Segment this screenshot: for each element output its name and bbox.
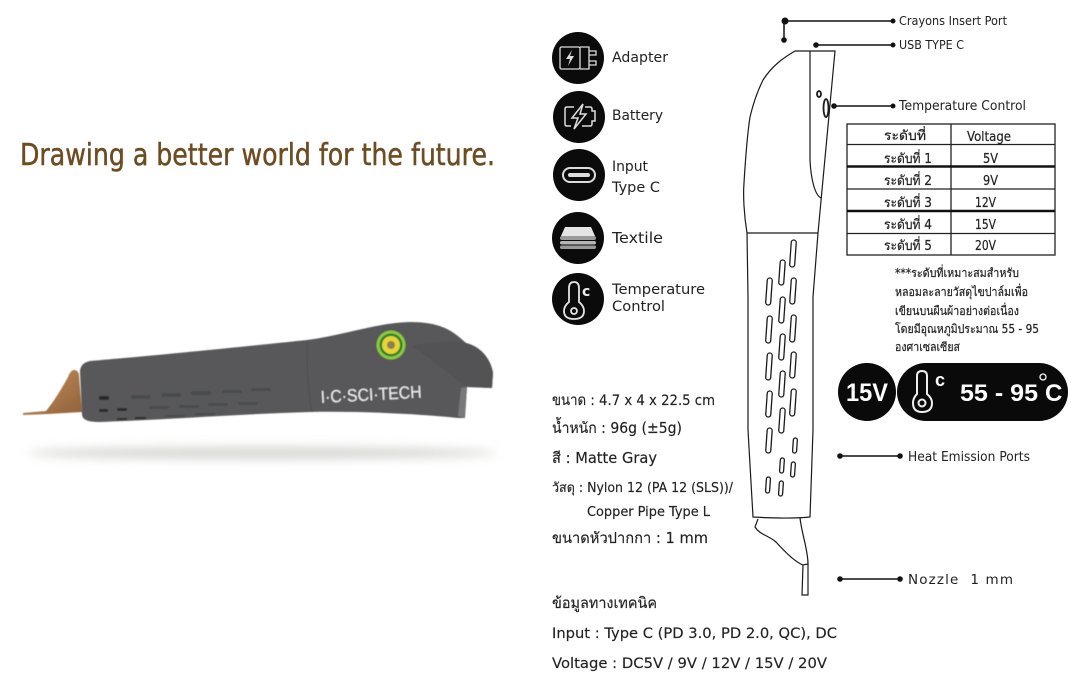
table row 1: 5V xyxy=(983,152,998,167)
technical input: Input : Type C (PD 3.0, PD 2.0, QC), DC xyxy=(552,626,837,642)
table header: ระดับที่ xyxy=(884,126,926,144)
note text xyxy=(895,264,1039,354)
callout: heat emission ports xyxy=(837,450,1030,465)
label: temperature control: Control xyxy=(612,299,665,315)
icon list xyxy=(552,32,705,325)
specifications xyxy=(552,393,734,547)
table row 4 xyxy=(884,215,996,233)
pen logo badge xyxy=(376,330,406,360)
table row 5: ระดับที่ 5 xyxy=(884,236,932,254)
pen end port xyxy=(458,387,467,418)
table row 3: 12V xyxy=(975,196,996,211)
diagram small hole xyxy=(817,91,821,97)
note text: หลอมละลายวัสดุไขปาล์มเพื่อ xyxy=(895,283,1028,300)
pen vents xyxy=(99,396,146,420)
spec: colour: สี : Matte Gray xyxy=(552,449,657,467)
pen shadow xyxy=(27,447,497,459)
badge: 15V xyxy=(838,363,896,421)
callout: temperature control xyxy=(831,99,1026,114)
table row 4: ระดับที่ 4 xyxy=(884,215,932,233)
spec: material line 2: Copper Pipe Type L xyxy=(587,505,711,520)
callout: nozzle xyxy=(837,572,1013,588)
icon: temperature xyxy=(552,273,604,325)
icon: textile xyxy=(552,212,604,264)
callout: crayons insert port xyxy=(781,14,1007,43)
diagram nozzle xyxy=(755,518,808,565)
table row 3 xyxy=(884,193,996,211)
pen grip marks xyxy=(131,388,271,417)
badge: temperature range xyxy=(897,363,1068,421)
table header: Voltage xyxy=(967,130,1011,145)
pen brand text: I·C·SCI·TECH xyxy=(320,382,422,407)
icon: temperature: c xyxy=(582,284,590,300)
pen line diagram xyxy=(744,51,835,595)
technical voltage: Voltage : DC5V / 9V / 12V / 15V / 20V xyxy=(552,656,827,672)
diagram cap seam xyxy=(810,51,821,198)
table row 3: ระดับที่ 3 xyxy=(884,193,932,211)
table header xyxy=(884,126,1011,145)
table row 1: ระดับที่ 1 xyxy=(884,149,932,167)
callout: temperature control: Temperature Control xyxy=(898,99,1026,114)
technical data xyxy=(552,594,837,672)
callout: usb type c xyxy=(813,38,964,52)
pen body xyxy=(80,322,493,422)
pen copper nozzle xyxy=(23,370,82,415)
spec: material: วัสดุ : Nylon 12 (PA 12 (SLS))/ xyxy=(552,481,734,496)
table row 4: 15V xyxy=(975,218,996,233)
label: textile: Textile xyxy=(611,229,663,247)
note text: เขียนบนผืนผ้าอย่างต่อเนื่อง xyxy=(895,302,1019,318)
table row 2: 9V xyxy=(983,174,998,189)
diagram nozzle pipe xyxy=(802,564,808,595)
diagram section line xyxy=(747,232,818,234)
badge: temperature range: 55 - 95 xyxy=(960,380,1038,407)
spec: size: ขนาด : 4.7 x 4 x 22.5 cm xyxy=(552,393,715,409)
label: temperature control: Temperature xyxy=(611,282,705,298)
pen grip seam xyxy=(307,340,312,412)
callout: usb type c: USB TYPE C xyxy=(899,38,964,52)
badge: temperature range: C xyxy=(1045,380,1062,407)
table row 2 xyxy=(884,171,998,189)
note text: ***ระดับที่เหมาะสมสำหรับ xyxy=(895,264,1019,280)
icon: input type c xyxy=(553,149,605,201)
label: adapter: Adapter xyxy=(612,50,668,66)
table row 2: ระดับที่ 2 xyxy=(884,171,932,189)
badge: 15V: 15V xyxy=(846,379,888,407)
callout: crayons insert port: Crayons Insert Port xyxy=(899,14,1007,28)
pen clip xyxy=(412,341,493,388)
table row 5: 20V xyxy=(975,239,996,254)
technical heading: ข้อมูลทางเทคนิค xyxy=(552,594,657,612)
voltage table xyxy=(847,124,1055,255)
spec: weight: น้ำหนัก : 96g (±5g) xyxy=(552,417,682,437)
label: temperature control xyxy=(611,282,705,315)
label: battery: Battery xyxy=(612,108,663,124)
label: input type c: Type C xyxy=(611,180,660,196)
diagram body outline xyxy=(744,51,835,518)
icon: battery xyxy=(553,91,605,143)
title: Drawing a better world for the future. xyxy=(20,138,495,173)
callout: nozzle: Nozzle 1 mm xyxy=(908,572,1013,588)
table row 5 xyxy=(884,236,996,254)
diagram heat vents xyxy=(765,240,797,496)
table row 1 xyxy=(884,149,998,167)
badge: temperature range: c xyxy=(935,370,945,390)
label: input type c: Input xyxy=(612,159,648,175)
callout: heat emission ports: Heat Emission Ports xyxy=(908,450,1030,465)
icon: adapter xyxy=(552,32,604,84)
label: input type c xyxy=(611,159,660,196)
diagram control button xyxy=(824,99,828,117)
spec: tip size: ขนาดหัวปากกา : 1 mm xyxy=(552,529,708,547)
product photo: pen xyxy=(23,322,493,422)
note text: โดยมีอุณหภูมิประมาณ 55 - 95 xyxy=(895,322,1039,337)
note text: องศาเซลเซียส xyxy=(895,340,961,354)
